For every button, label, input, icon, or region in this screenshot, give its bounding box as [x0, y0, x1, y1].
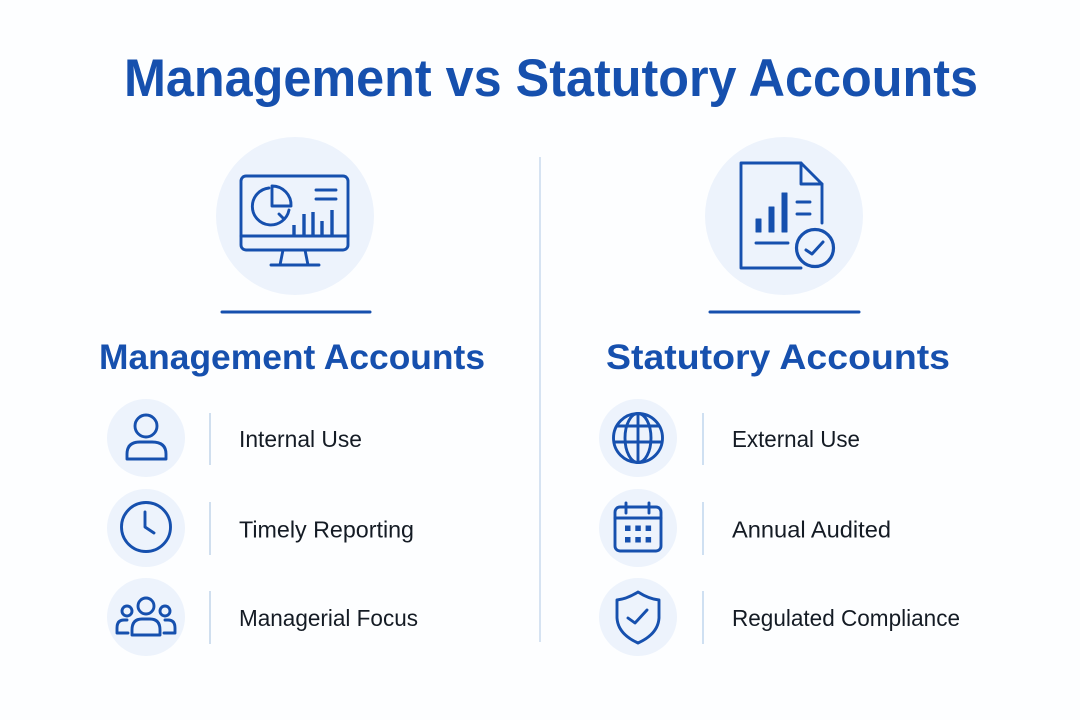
row: timely reporting: Timely Reporting: [239, 516, 414, 542]
icon: monitor with charts: [216, 137, 374, 295]
row: internal use: Internal Use: [239, 426, 362, 452]
title: Management vs Statutory Accounts: [124, 49, 978, 108]
row: external use: [599, 399, 860, 477]
heading: statutory accounts: Statutory Accounts: [606, 337, 950, 377]
row: internal use: [107, 399, 362, 477]
row: annual audited: [599, 489, 891, 567]
row: managerial focus: [107, 578, 418, 656]
row: regulated compliance: Regulated Compliance: [732, 605, 960, 631]
panel: statutory accounts: [599, 137, 960, 656]
panel: management accounts: [99, 137, 485, 656]
heading: management accounts: Management Accounts: [99, 337, 485, 377]
row: annual audited: Annual Audited: [732, 516, 891, 542]
row: timely reporting: [107, 489, 414, 567]
icon: document with check: [705, 137, 863, 295]
row: external use: External Use: [732, 426, 860, 452]
row: managerial focus: Managerial Focus: [239, 605, 418, 631]
row: regulated compliance: [599, 578, 960, 656]
